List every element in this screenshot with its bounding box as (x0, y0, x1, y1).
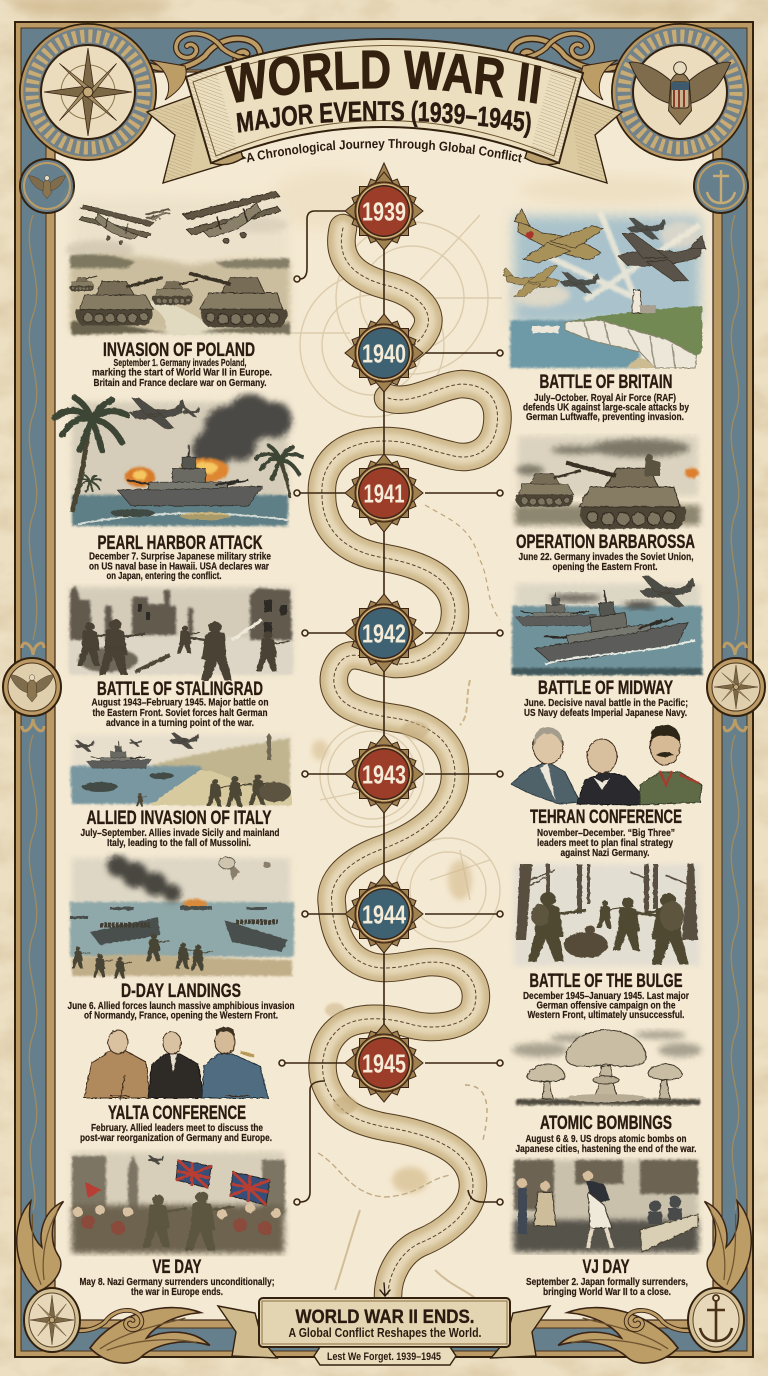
text: Pearl Harbor Attack: December 7. Surprise Japanese military strike (89, 550, 271, 562)
heading: Pearl Harbor Attack: PEARL HARBOR ATTACK (98, 532, 262, 554)
text: Pearl Harbor Attack: on Japan, entering the conflict. (106, 570, 222, 582)
top scrollwork (150, 34, 620, 100)
heading: Battle of the Bulge: BATTLE OF THE BULGE (530, 970, 682, 992)
text: Battle of Stalingrad: the Eastern Front. Soviet forces halt German (92, 707, 268, 719)
bottom corner ornaments (12, 1198, 756, 1369)
text: Yalta Conference (80, 1122, 272, 1144)
badge: 1942: 1942 (362, 618, 406, 648)
text: D-Day Landings: of Normandy, France, opening the Western Front. (84, 1010, 278, 1022)
illustration: Yalta Conference (84, 1027, 268, 1100)
top-left compass medallion (20, 24, 156, 160)
motto plate: Lest We Forget. 1939–1945 (327, 1351, 441, 1363)
heading: Battle of Stalingrad: BATTLE OF STALINGRAD (97, 678, 263, 700)
text: Invasion of Poland: marking the start of World War II in Europe. (92, 366, 272, 378)
text: Battle of Midway: June. Decisive naval battle in the Pacific; (524, 697, 688, 709)
ribbon tails (147, 95, 622, 183)
illustration: VE Day (72, 1152, 285, 1253)
badge: 1945 (345, 1024, 423, 1102)
badge: 1945: 1945 (362, 1048, 406, 1078)
bottom-right anchor medallion (688, 1288, 744, 1352)
text: Allied Invasion of Italy: July–September. Allies invade Sicily and mainland (80, 827, 280, 839)
badge: 1939 (345, 163, 423, 250)
text: Invasion of Poland: September 1. Germany invades Poland, (114, 357, 247, 369)
text: Tehran Conference: November–December. “Big Three” (537, 827, 675, 839)
left side eagle medallion (3, 643, 61, 731)
text: Pearl Harbor Attack (89, 550, 271, 582)
text: D-Day Landings: June 6. Allied forces launch massive amphibious invasion (68, 1000, 294, 1012)
badge: 1942 (345, 594, 423, 672)
text: Battle of Stalingrad: advance in a turning point of the war. (106, 717, 254, 729)
text: Invasion of Poland (92, 357, 272, 389)
text: Allied Invasion of Italy: Italy, leading to the fall of Mussolini. (107, 837, 251, 849)
text: VJ Day: bringing World War II to a close. (543, 1286, 671, 1298)
illustration: Battle of Stalingrad (70, 586, 292, 680)
illustration: Battle of the Bulge (514, 864, 700, 966)
text: Invasion of Poland: Britain and France declare war on Germany. (94, 377, 267, 389)
illustration: D-Day Landings (70, 855, 294, 978)
text: Atomic Bombings: August 6 & 9. US drops atomic bombs on (526, 1133, 686, 1145)
text: Battle of Britain: July–October. Royal Air Force (RAF) (534, 392, 676, 404)
heading: VJ Day: VJ DAY (582, 1256, 630, 1278)
timeline spine and connectors (279, 200, 503, 1205)
illustration: Tehran Conference (511, 725, 702, 805)
illustration: Pearl Harbor Attack (54, 394, 302, 526)
closing subheading: A Global Conflict Reshapes the World. (288, 1326, 482, 1340)
text: VE Day: May 8. Nazi Germany surrenders unconditionally; (80, 1276, 274, 1288)
heading: D-Day Landings: D-DAY LANDINGS (121, 980, 241, 1002)
closing ribbon (218, 1298, 550, 1358)
text: Atomic Bombings: Japanese cities, hastening the end of the war. (516, 1143, 697, 1155)
text: Battle of the Bulge: Western Front, ultimately unsuccessful. (528, 1009, 685, 1021)
heading: Battle of Britain: BATTLE OF BRITAIN (540, 371, 672, 393)
badge: 1943 (345, 735, 423, 813)
text: Battle of Midway: US Navy defeats Imperial Japanese Navy. (524, 707, 687, 719)
heading: VE Day: VE DAY (152, 1256, 202, 1278)
text: Battle of Britain (523, 392, 689, 423)
text: D-Day Landings (68, 1000, 294, 1022)
text: VE Day: the war in Europe ends. (131, 1286, 223, 1298)
text: Battle of Britain: German Luftwaffe, preventing invasion. (526, 411, 684, 423)
text: Battle of Stalingrad: August 1943–February 1945. Major battle on (92, 696, 268, 708)
bottom-left compass medallion (24, 1288, 80, 1352)
text: Battle of Midway (524, 697, 688, 719)
heading: Battle of Midway: BATTLE OF MIDWAY (538, 677, 673, 699)
badge: 1939: 1939 (362, 196, 406, 226)
heading: Yalta Conference: YALTA CONFERENCE (108, 1102, 246, 1124)
tagline: A Chronological Journey Through Global Conflict (247, 138, 522, 162)
parchment stains and map traces (270, 170, 700, 1298)
subtitle: MAJOR EVENTS (1939–1945) (236, 100, 531, 138)
heading: Atomic Bombings: ATOMIC BOMBINGS (540, 1112, 672, 1134)
text: VJ Day: September 2. Japan formally surrenders, (526, 1276, 688, 1288)
top-right eagle medallion (612, 24, 748, 160)
text: Yalta Conference: post-war reorganization of Germany and Europe. (80, 1132, 272, 1144)
badge: 1941: 1941 (364, 478, 404, 508)
text: Battle of the Bulge: German offensive campaign on the (536, 1000, 676, 1012)
badge: 1941 (345, 454, 423, 532)
illustration: Allied Invasion of Italy (70, 733, 292, 807)
badge: 1944 (345, 875, 423, 953)
illustration: Battle of Britain (503, 206, 706, 368)
cream inner panel (55, 72, 713, 1320)
text: Tehran Conference: leaders meet to plan final strategy (537, 837, 673, 849)
text: Yalta Conference: February. Allied leaders meet to discuss the (91, 1122, 263, 1134)
text: Tehran Conference (537, 827, 675, 859)
text: Allied Invasion of Italy (80, 827, 280, 849)
title ribbon (146, 38, 624, 184)
badge: 1944: 1944 (362, 900, 406, 930)
heading: Operation Barbarossa: OPERATION BARBAROSSA (516, 531, 695, 553)
small left eagle medallion (20, 159, 74, 213)
closing heading: WORLD WAR II ENDS. (296, 1306, 474, 1328)
text: Tehran Conference: against Nazi Germany. (560, 847, 650, 859)
side band vines (29, 215, 739, 1210)
illustration: Atomic Bombings (512, 1030, 702, 1105)
text: Battle of the Bulge (523, 990, 689, 1021)
small right anchor medallion (694, 159, 748, 213)
text: Battle of Britain: defends UK against large-scale attacks by (523, 402, 689, 414)
text: Battle of Stalingrad (92, 696, 268, 729)
text: Operation Barbarossa: opening the Eastern Front. (552, 561, 658, 573)
heading: Allied Invasion of Italy: ALLIED INVASION OF ITALY (86, 807, 272, 829)
illustration: VJ Day (514, 1160, 698, 1252)
illustration: Operation Barbarossa (515, 436, 700, 529)
text: Battle of the Bulge: December 1945–January 1945. Last major (523, 990, 689, 1002)
text: Pearl Harbor Attack: on US naval base in Hawaii. USA declares war (89, 560, 269, 572)
illustration: Invasion of Poland (66, 191, 290, 335)
right side compass medallion (707, 643, 765, 731)
heading: Tehran Conference: TEHRAN CONFERENCE (530, 806, 682, 828)
text: VE Day (80, 1276, 274, 1298)
text: Operation Barbarossa: June 22. Germany invades the Soviet Union, (518, 551, 694, 563)
badge: 1940 (345, 314, 423, 392)
winding route snake (322, 228, 498, 1296)
illustration: Battle of Midway (512, 576, 702, 675)
tanks (76, 277, 163, 325)
motto plate (314, 1347, 456, 1365)
main title: WORLD WAR II (224, 50, 542, 104)
text: VJ Day (526, 1276, 688, 1298)
badge: 1940: 1940 (362, 338, 406, 368)
heading: Invasion of Poland: INVASION OF POLAND (103, 339, 255, 361)
badge: 1943: 1943 (362, 760, 406, 790)
text: Atomic Bombings (516, 1133, 697, 1155)
text: Operation Barbarossa (518, 551, 694, 573)
